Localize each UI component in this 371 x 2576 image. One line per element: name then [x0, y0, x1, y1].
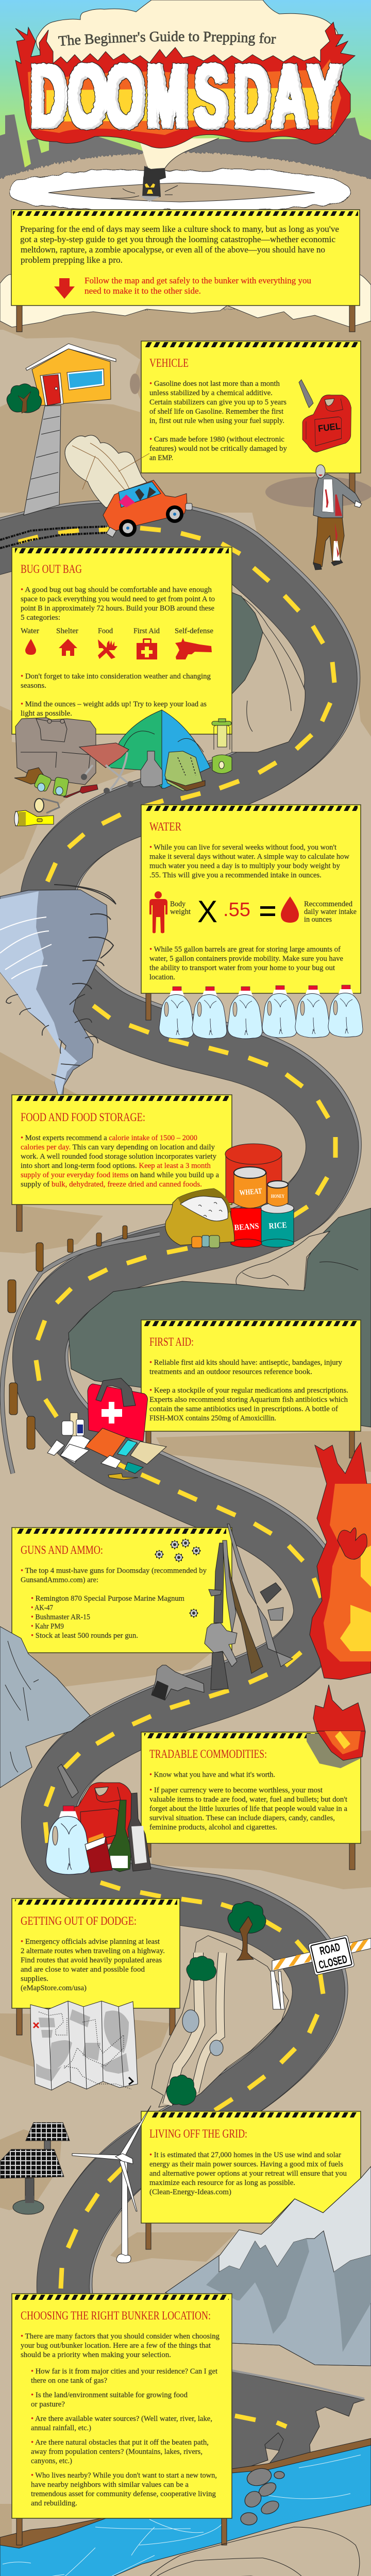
headlamp [35, 799, 59, 813]
bag heading: BUG OUT BAG [21, 563, 82, 575]
scissors [108, 1473, 138, 1480]
intro paragraph: Preparing for the end of days may seem like a culture shock to many, but as long as you've [20, 224, 339, 234]
bunker text: should be a priority when making your selection. [21, 2351, 171, 2359]
water formula [149, 891, 357, 934]
handgun [151, 1665, 204, 1700]
bunker text: • Who lives nearby? While you don't want to start a new town, [31, 2471, 217, 2480]
bunker text: or pasture? [31, 2400, 65, 2409]
bunker text [21, 2332, 220, 2507]
city skyline [0, 114, 371, 185]
backpack [15, 718, 96, 785]
DOOMSDAY wordmark: DOOMSDAY [31, 47, 341, 146]
first aid text: Experts also recommend storing Aquarium fish antibiotics which [149, 1396, 348, 1404]
bunker text: • How far is it from major cities and your residence? Can I get [31, 2367, 218, 2376]
guns text: • Bushmaster AR-15 [31, 1613, 90, 1621]
food text: • Most experts recommend a calorie intake of 1500 – 2000 [21, 1134, 197, 1142]
water text: • While 55 gallon barrels are great for storing large amounts of [149, 945, 341, 954]
grid text [149, 2151, 347, 2196]
cyan bandage [117, 1440, 137, 1456]
right rifle [227, 1524, 293, 1667]
category labels [21, 627, 213, 635]
vehicle text: • Cars made before 1980 (without electronic [149, 435, 284, 444]
category labels: Self-defense [175, 627, 213, 635]
first aid sign [141, 1320, 361, 1431]
first aid heading: FIRST AID: [149, 1335, 194, 1348]
guns text: • Stock at least 500 rounds per gun. [31, 1632, 138, 1640]
ring cloud and bomb [9, 166, 350, 210]
rock outcrop lower [69, 1208, 371, 1427]
first aid text: • Keep a stockpile of your regular medications and prescriptions. [149, 1386, 348, 1395]
ground horizon [0, 152, 371, 309]
tradable heading: TRADABLE COMMODITIES: [149, 1748, 267, 1760]
category labels: First Aid [133, 627, 160, 635]
hat [14, 768, 44, 784]
food text: work. A well rounded food storage solution incorporates variety [21, 1153, 216, 1161]
reference book [130, 1442, 166, 1464]
can: wheat: WHEAT [239, 1187, 262, 1197]
grid text: (Clean-Energy-Ideas.com) [149, 2188, 231, 2196]
bag text: seasons. [21, 682, 46, 690]
guns sign [12, 1528, 232, 1653]
solar panels [0, 2123, 70, 2214]
grid text: maximize each resource for as long as possible. [149, 2179, 295, 2187]
water jugs [159, 985, 363, 1039]
water formula: .55 [223, 899, 250, 921]
water text: water, 5 gallon containers provide mobility. Make sure you have [149, 955, 343, 963]
first aid text: • Reliable first aid kits should have: antiseptic, bandages, injury [149, 1359, 342, 1367]
intro sign posts [16, 304, 355, 332]
water text: • While you can live for several weeks without food, you won't [149, 843, 337, 852]
bag text: point B in approximately 72 hours. Build your BOB around these [21, 604, 214, 613]
icon: person [149, 891, 167, 934]
map [30, 2001, 138, 2090]
red bag [88, 1378, 147, 1442]
water text: make it several days without water. A simple way to calculate how [149, 853, 349, 861]
tradable text [149, 1771, 348, 1832]
grid heading: LIVING OFF THE GRID: [149, 2127, 247, 2140]
grid text: energy as their main power sources. Having a good mix of fuels [149, 2160, 343, 2168]
tradable text: • If paper currency were to become worthless, your most [149, 1786, 323, 1794]
can: rice [261, 1203, 294, 1247]
canteen [141, 751, 162, 787]
guns text: • The top 4 must-have guns for Doomsday (recommended by [21, 1567, 207, 1575]
cigarettes [85, 1833, 112, 1873]
orange manual [85, 1428, 126, 1459]
dodge text: • Emergency officials advise planning at least [21, 1938, 160, 1946]
lower flame [313, 1685, 365, 1760]
bag text: 5 categories: [21, 614, 60, 622]
road [0, 527, 334, 2429]
food text: supply of your everyday food items on hand while you build up a [21, 1171, 219, 1179]
icon: food [98, 639, 117, 659]
water text: much water you need a day is to multiply your body weight by [149, 862, 340, 870]
bullet holes [155, 1538, 201, 1618]
bunker text: your bug out/bunker location. Here are a few of the things that [21, 2342, 211, 2350]
bunker text: have nearby neighbors with similar values can be a [31, 2481, 189, 2489]
fuel can [299, 380, 351, 452]
icon: pistol [175, 638, 212, 659]
guard rail upper [2, 1226, 160, 1473]
small tins [192, 1235, 220, 1248]
vehicle text: unless stabilized by a chemical additive. [149, 389, 273, 397]
water formula: Reccommended [304, 900, 352, 908]
dodge text [21, 1938, 165, 1992]
water formula: weight [170, 908, 191, 916]
bandage roll [62, 1413, 84, 1436]
bag text: light as possible. [21, 709, 72, 718]
category labels: Shelter [56, 627, 78, 635]
food text: into short and long-term food options. Keep at least a 3 month [21, 1162, 211, 1170]
guns text: • AK-47 [31, 1604, 53, 1612]
vehicle text: of shelf life on Gasoline. Remember the first [149, 408, 284, 416]
bug out gear [14, 710, 232, 826]
boots [165, 751, 205, 791]
front rifle [205, 1543, 237, 1690]
sack [165, 1189, 234, 1245]
category labels: Water [21, 627, 39, 635]
wine bottle dark [128, 1793, 151, 1871]
river stepping stones [241, 2466, 284, 2525]
icon: first aid [137, 638, 157, 659]
bunker heading: CHOOSING THE RIGHT BUNKER LOCATION: [21, 2309, 211, 2322]
bag text: • A good bug out bag should be comfortable and have enough [21, 586, 212, 594]
dodge text: and are close to water and possible food [21, 1965, 145, 1974]
water formula: daily water intake [304, 908, 357, 916]
title fire band [15, 22, 356, 148]
dressings [47, 1432, 121, 1468]
water text: .55. This will give you a recommended intake in ounces. [149, 871, 322, 879]
bunker text: • Are there available water sources? (Well water, river, lake, [31, 2415, 212, 2423]
dodge text: (eMapStore.com/usa) [21, 1984, 87, 1992]
bag text: space to pack everything you would need to get from point A to [21, 595, 215, 603]
intro sign [11, 210, 360, 306]
water text: location. [149, 973, 175, 981]
blue rock [0, 1626, 90, 1788]
trade goods [46, 1764, 151, 1874]
can: honey [267, 1181, 288, 1207]
vehicle sign [141, 341, 361, 473]
vehicle text: • Gasoline does not last more than a month [149, 380, 280, 388]
tradable text: valuable items to trade are food, water, fuel and bullets; but don't [149, 1795, 348, 1804]
food heading: FOOD AND FOOD STORAGE: [21, 1111, 145, 1124]
grid text: • It is estimated that 27,000 homes in the US use wind and solar [149, 2151, 341, 2159]
can: beans [231, 1208, 262, 1247]
grid text: and alternative power options at your retreat will ensure that you [149, 2170, 347, 2178]
first aid text [149, 1359, 348, 1422]
bunker door [128, 2527, 360, 2576]
first aid text: treatments and an outdoor resources reference book. [149, 1368, 312, 1376]
water sign [141, 805, 361, 993]
mountain snow back [217, 2166, 371, 2267]
wooden rifle [223, 1540, 263, 1673]
sign posts [16, 471, 355, 2545]
guns text: • Remington 870 Special Purpose Marine Magnum [31, 1595, 184, 1603]
title line: The Beginner's Guide to Prepping for [58, 31, 276, 46]
road rock outcrop upper [232, 592, 305, 752]
arrow [54, 278, 75, 299]
house [7, 344, 116, 515]
road centre dashes [19, 528, 335, 2427]
mushroom cloud [36, 0, 339, 173]
wine bottle green [108, 1800, 131, 1872]
dodge text: Find routes that avoid heavily populated areas [21, 1956, 162, 1964]
tradable text: • Know what you have and what it's worth. [149, 1771, 275, 1779]
bug out bag sign [12, 547, 232, 734]
can: wheat [234, 1167, 266, 1208]
scorch and flame base [307, 1731, 365, 1768]
fuel can: FUEL [317, 421, 341, 434]
bunker text: • There are many factors that you should consider when choosing [21, 2332, 220, 2341]
tradable text: forget about the little luxuries of life that people would value in a [149, 1805, 347, 1813]
dodge heading: GETTING OUT OF DODGE: [21, 1914, 137, 1927]
bunker text: tremendous asset for community defense, cooperative living [31, 2490, 216, 2498]
binoculars [33, 773, 69, 796]
bunker text: and rebuilding. [31, 2499, 77, 2507]
broken road end [227, 2370, 364, 2473]
intro paragraph: problem prepping like a pro. [21, 255, 123, 265]
dodge text: supplies. [21, 1975, 48, 1983]
bunker text: canyons, etc.) [31, 2457, 72, 2465]
lantern [212, 719, 232, 774]
dodge sign [12, 1899, 180, 2008]
vehicle text [149, 380, 287, 462]
knife [63, 785, 98, 798]
map instruction [85, 276, 311, 296]
tradable sign [141, 1731, 365, 1843]
first aid text: contain the same antibiotics used in prescriptions. A bottle of [149, 1405, 338, 1413]
food text: supply of bulk, dehydrated, freeze dried and canned foods. [21, 1180, 202, 1189]
rocky waterfall [151, 1902, 289, 2107]
water heading: WATER [149, 820, 182, 833]
tent [108, 710, 210, 788]
water formula: X [197, 894, 217, 929]
bunker text: away from population centers? (Mountains, lakes, rivers, [31, 2448, 203, 2456]
can: beans: BEANS [234, 1222, 259, 1232]
skid marks [0, 527, 107, 548]
bunker text: • Is the land/environment suitable for growing food [31, 2391, 188, 2399]
vehicle text: features) would not be critically damaged by [149, 445, 287, 453]
bunker sign [12, 2294, 232, 2518]
small pads [125, 1462, 143, 1473]
bunker text: annual rainfall, etc.) [31, 2424, 91, 2432]
vehicle text: Certain stabilizers can give you up to 5 years [149, 398, 286, 406]
map instruction: need to make it to the other side. [85, 286, 201, 296]
guns text [21, 1567, 207, 1640]
zombie [313, 465, 362, 570]
guns text: GunsandAmmo.com) are: [21, 1576, 98, 1584]
vehicle text: an EMP. [149, 454, 173, 462]
big fire [310, 1443, 371, 1680]
car with bundle [65, 435, 192, 537]
flashlight [14, 810, 54, 826]
water formula: Body [170, 900, 185, 908]
tradable text: feminine products, alcohol and cigarettes. [149, 1823, 277, 1832]
camp chair [79, 743, 133, 794]
tradable text: survival situation. These can include diapers, candy, candles, [149, 1814, 335, 1822]
food text: calories per day. This can vary depending on location and daily [21, 1143, 215, 1151]
vehicle text: in, first out rule when using your fuel supply. [149, 417, 284, 425]
intro paragraph: meltdown, rapture, a zombie apocalypse, or even all of the above—you should have no [21, 245, 325, 255]
bag text [21, 586, 215, 718]
first aid kit [47, 1378, 166, 1480]
water text: the ability to transport water from your home to your bug out [149, 964, 335, 972]
bomb [111, 166, 178, 202]
can: honey: HONEY [271, 1194, 284, 1199]
bag text: • Mind the ounces – weight adds up! Try to keep your load as [21, 700, 207, 708]
road closed barricade [271, 1935, 371, 2009]
tornado [0, 885, 116, 1095]
road closed barricade: ROAD [318, 1940, 341, 1957]
guns text: • Kahr PM9 [31, 1622, 64, 1631]
cream cloud band behind intro [0, 275, 371, 327]
guns [151, 1524, 293, 1700]
grid sign [141, 2111, 361, 2223]
intro paragraph: got a step-by-step guide to get you through the looming catastrophe—whether economic [20, 234, 335, 244]
drum [225, 1144, 282, 1203]
map instruction: Follow the map and get safely to the bunker with everything you [85, 276, 311, 285]
bunker text: • Are there natural obstacles that put it off the beaten path, [31, 2438, 209, 2447]
wind turbine [72, 2106, 151, 2263]
jug [46, 1806, 90, 1874]
gas can [58, 1764, 132, 1851]
food text [21, 1134, 219, 1189]
first aid text: FISH-MOX contains 250mg of Amoxicillin. [149, 1414, 276, 1422]
category labels: Food [98, 627, 113, 635]
water text [149, 843, 349, 981]
food storage props [165, 1144, 294, 1248]
bunker text: there on one tank of gas? [31, 2377, 107, 2385]
river [0, 2438, 371, 2576]
icon: water drop [25, 639, 36, 655]
road closed barricade: CLOSED [317, 1953, 348, 1972]
dodge text: 2 alternate routes when traveling on a highway. [21, 1947, 165, 1955]
guns heading: GUNS AND AMMO: [21, 1544, 103, 1556]
bag text: • Don't forget to take into consideration weather and changing [21, 672, 211, 681]
intro paragraph [20, 224, 339, 265]
icon: shelter [59, 639, 77, 656]
mountains [165, 2166, 371, 2366]
vehicle heading: VEHICLE [149, 357, 189, 369]
food sign [12, 1095, 232, 1205]
water formula: in ounces [304, 916, 332, 924]
can: rice: RICE [268, 1221, 287, 1231]
